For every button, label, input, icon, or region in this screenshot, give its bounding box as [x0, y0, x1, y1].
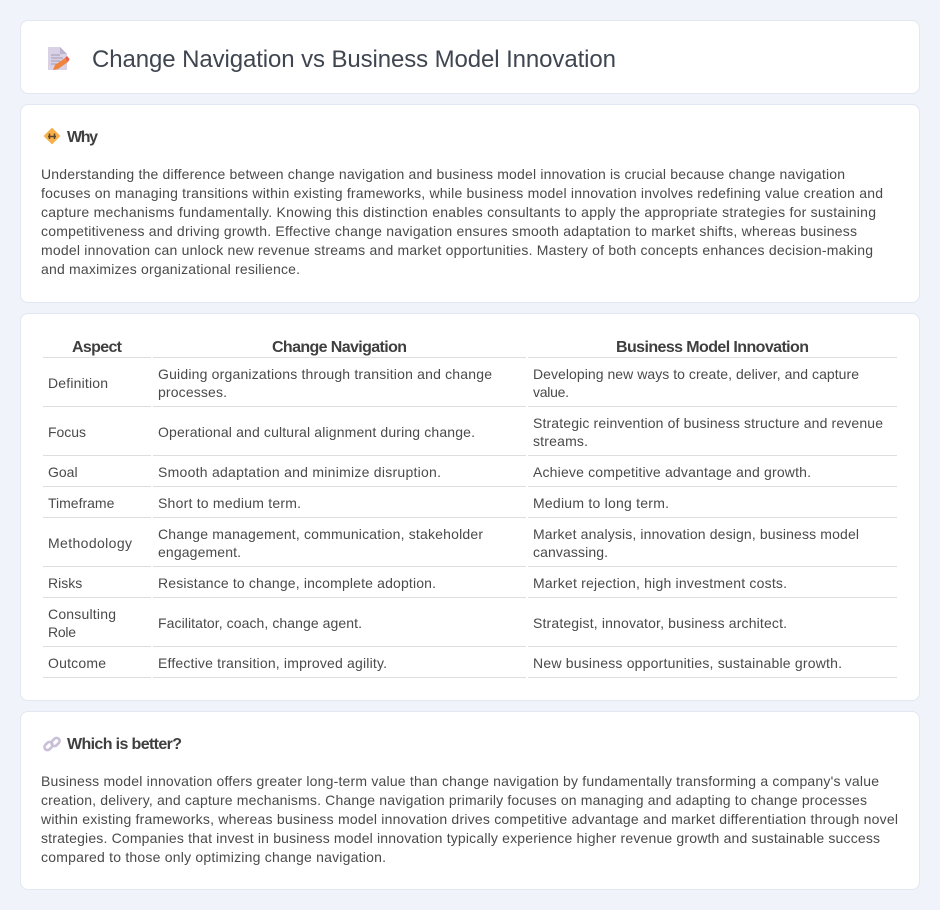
- row: timeframe: Short to medium term.: [158, 495, 301, 511]
- row: timeframe: Medium to long term.: [533, 495, 669, 511]
- row: risks: Risks: [48, 575, 82, 591]
- row: outcome: New business opportunities, sustainable growth.: [533, 655, 842, 671]
- row: methodology: Market analysis, innovation design, business model: [533, 526, 859, 542]
- row: timeframe: Timeframe: [48, 495, 115, 511]
- heading: why: Why: [67, 129, 98, 146]
- row: consulting role: Strategist, innovator, business architect.: [533, 615, 787, 631]
- icon: document with pencil: [48, 47, 70, 70]
- panel: comparison table: [20, 313, 920, 701]
- which is better paragraph: Business model innovation offers greater long-term value than change navigation by fundamentally transforming a company's value: [41, 773, 879, 789]
- which is better paragraph: compared to those only optimizing change navigation.: [41, 849, 386, 865]
- row: goal: Goal: [48, 464, 78, 480]
- why paragraph: [41, 166, 883, 277]
- table text: [48, 339, 883, 671]
- why paragraph: capture mechanisms fundamentally. Knowing this distinction enables consultants to apply the appropriate strategies for sustaining: [41, 204, 876, 220]
- panel: title header: [20, 20, 920, 94]
- why paragraph: model innovation can unlock new revenue streams and market opportunities. Mastery of both concepts enhances decision-making: [41, 242, 873, 258]
- icon: diamond sign: [44, 128, 60, 144]
- which is better paragraph: [40, 773, 898, 865]
- row: methodology: canvassing.: [533, 544, 608, 560]
- row: risks: Resistance to change, incomplete adoption.: [158, 575, 436, 591]
- row: definition: Guiding organizations through transition and change: [158, 366, 492, 382]
- panel: why: [20, 104, 920, 303]
- row: timeframe: [48, 495, 669, 511]
- row: focus: [48, 415, 883, 449]
- row: goal: [48, 464, 811, 480]
- table header: Business Model Innovation: [616, 339, 809, 356]
- row: methodology: [48, 526, 859, 560]
- icon: chain link: [43, 736, 61, 752]
- row: methodology: Methodology: [48, 535, 132, 551]
- row: goal: Achieve competitive advantage and growth.: [533, 464, 811, 480]
- row: methodology: Change management, communication, stakeholder: [158, 526, 483, 542]
- row: focus: Focus: [48, 424, 86, 440]
- row: definition: processes.: [158, 384, 227, 400]
- row: outcome: Outcome: [48, 655, 106, 671]
- row: outcome: [48, 655, 842, 671]
- which is better paragraph: creation, delivery, and capture mechanisms. Change navigation primarily focuses on managing and adapting to change processes: [41, 792, 867, 808]
- row: consulting role: Consulting: [48, 606, 116, 622]
- why paragraph: and maximizes organizational resilience.: [41, 261, 300, 277]
- row: goal: Smooth adaptation and minimize disruption.: [158, 464, 441, 480]
- row: definition: Definition: [48, 375, 108, 391]
- row: focus: Strategic reinvention of business structure and revenue: [533, 415, 883, 431]
- row: consulting role: Role: [48, 624, 76, 640]
- panel: which is better: [20, 711, 920, 890]
- row: risks: [48, 575, 787, 591]
- why paragraph: competitiveness and driving growth. Effective change navigation ensures smooth adaptation to market shifts, whereas business: [41, 223, 857, 239]
- row: consulting role: [48, 606, 787, 640]
- row: methodology: engagement.: [158, 544, 241, 560]
- why paragraph: Understanding the difference between change navigation and business model innovation is crucial because change navigation: [41, 166, 845, 182]
- which is better paragraph: strategies. Companies that invest in business model innovation typically experience higher revenue growth and sustainable success: [41, 830, 880, 846]
- table header: Aspect: [72, 339, 123, 356]
- which is better paragraph: within existing frameworks, whereas business model innovation drives competitive advantage and market differentiation through novel: [40, 811, 898, 827]
- heading: which is better: Which is better?: [67, 736, 182, 753]
- row: risks: Market rejection, high investment costs.: [533, 575, 787, 591]
- row: definition: Developing new ways to create, deliver, and capture: [533, 366, 859, 382]
- title: Change Navigation vs Business Model Innovation: [92, 46, 616, 73]
- row: focus: streams.: [533, 433, 588, 449]
- table header: [72, 339, 809, 356]
- row: consulting role: Facilitator, coach, change agent.: [158, 615, 362, 631]
- row: focus: Operational and cultural alignment during change.: [158, 424, 475, 440]
- row: definition: value.: [533, 384, 569, 400]
- why paragraph: focuses on managing transitions within existing frameworks, while business model innovation involves redefining value creation and: [41, 185, 883, 201]
- row: definition: [48, 366, 859, 400]
- row: outcome: Effective transition, improved agility.: [158, 655, 387, 671]
- table header: Change Navigation: [272, 339, 407, 356]
